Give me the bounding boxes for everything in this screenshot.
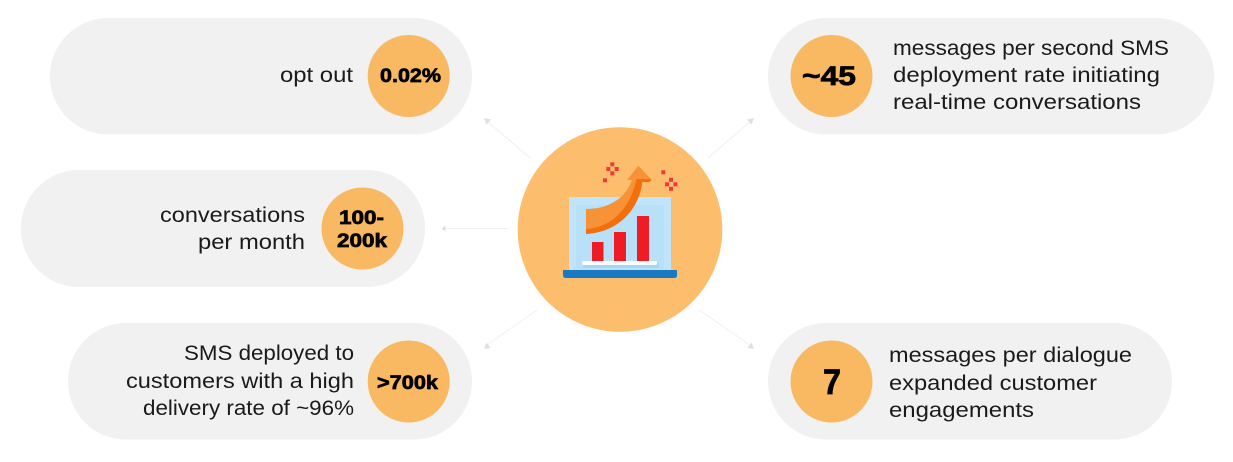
text: messages per dialogue: messages per dialogue [889, 344, 1132, 367]
badge: 7 [790, 340, 872, 422]
text: opt out: opt out [280, 64, 353, 87]
badge: 0.02% [368, 35, 450, 117]
badge: ~45: ~45 [802, 61, 856, 91]
text: conversations per month [160, 204, 305, 254]
badge: >700k: >700k [377, 372, 438, 394]
arrow: to SMS deployed [484, 310, 537, 349]
text: messages per dialogue: expanded customer [889, 372, 1097, 395]
text: messages per dialogue: engagements [889, 399, 1034, 422]
text: messages per second: deployment rate initiating [893, 64, 1160, 87]
badge: 7: 7 [823, 363, 841, 402]
text: messages per second [893, 37, 1169, 114]
text: SMS deployed to customers [126, 342, 354, 420]
arrow: to opt out [484, 118, 530, 158]
badge: ~45 [790, 35, 872, 117]
icon: sparkle right [665, 178, 677, 191]
text: conversations per month: conversations [160, 204, 305, 227]
arrow: to conversations [442, 226, 508, 232]
text: messages per dialogue [889, 344, 1132, 422]
text: SMS deployed to customers: delivery rate of ~96% [143, 397, 354, 420]
panel: conversations per month [21, 170, 425, 287]
text: messages per second: messages per second SMS [893, 37, 1169, 60]
badge: 100-200k [322, 188, 404, 270]
arrow: to messages per second [708, 118, 754, 158]
text: SMS deployed to customers: SMS deployed to [184, 342, 354, 365]
text: conversations per month: per month [198, 231, 305, 254]
arrow: to messages per dialogue [699, 310, 754, 349]
badge: 0.02%: 0.02% [380, 65, 441, 87]
text: messages per second: real-time conversations [893, 91, 1141, 114]
badge: 100-200k: 200k [337, 230, 387, 252]
badge: >700k [368, 340, 450, 422]
central circle [518, 127, 722, 332]
badge: 100-200k: 100- [339, 207, 384, 229]
text: SMS deployed to customers: customers with a high [126, 370, 354, 393]
panel: SMS deployed [68, 323, 472, 440]
panel: messages per dialogue [768, 323, 1172, 440]
icon: sparkle left [606, 162, 619, 175]
panel: opt out [50, 18, 472, 134]
panel: messages per second [768, 18, 1214, 134]
icon: laptop with rising chart [563, 162, 677, 278]
